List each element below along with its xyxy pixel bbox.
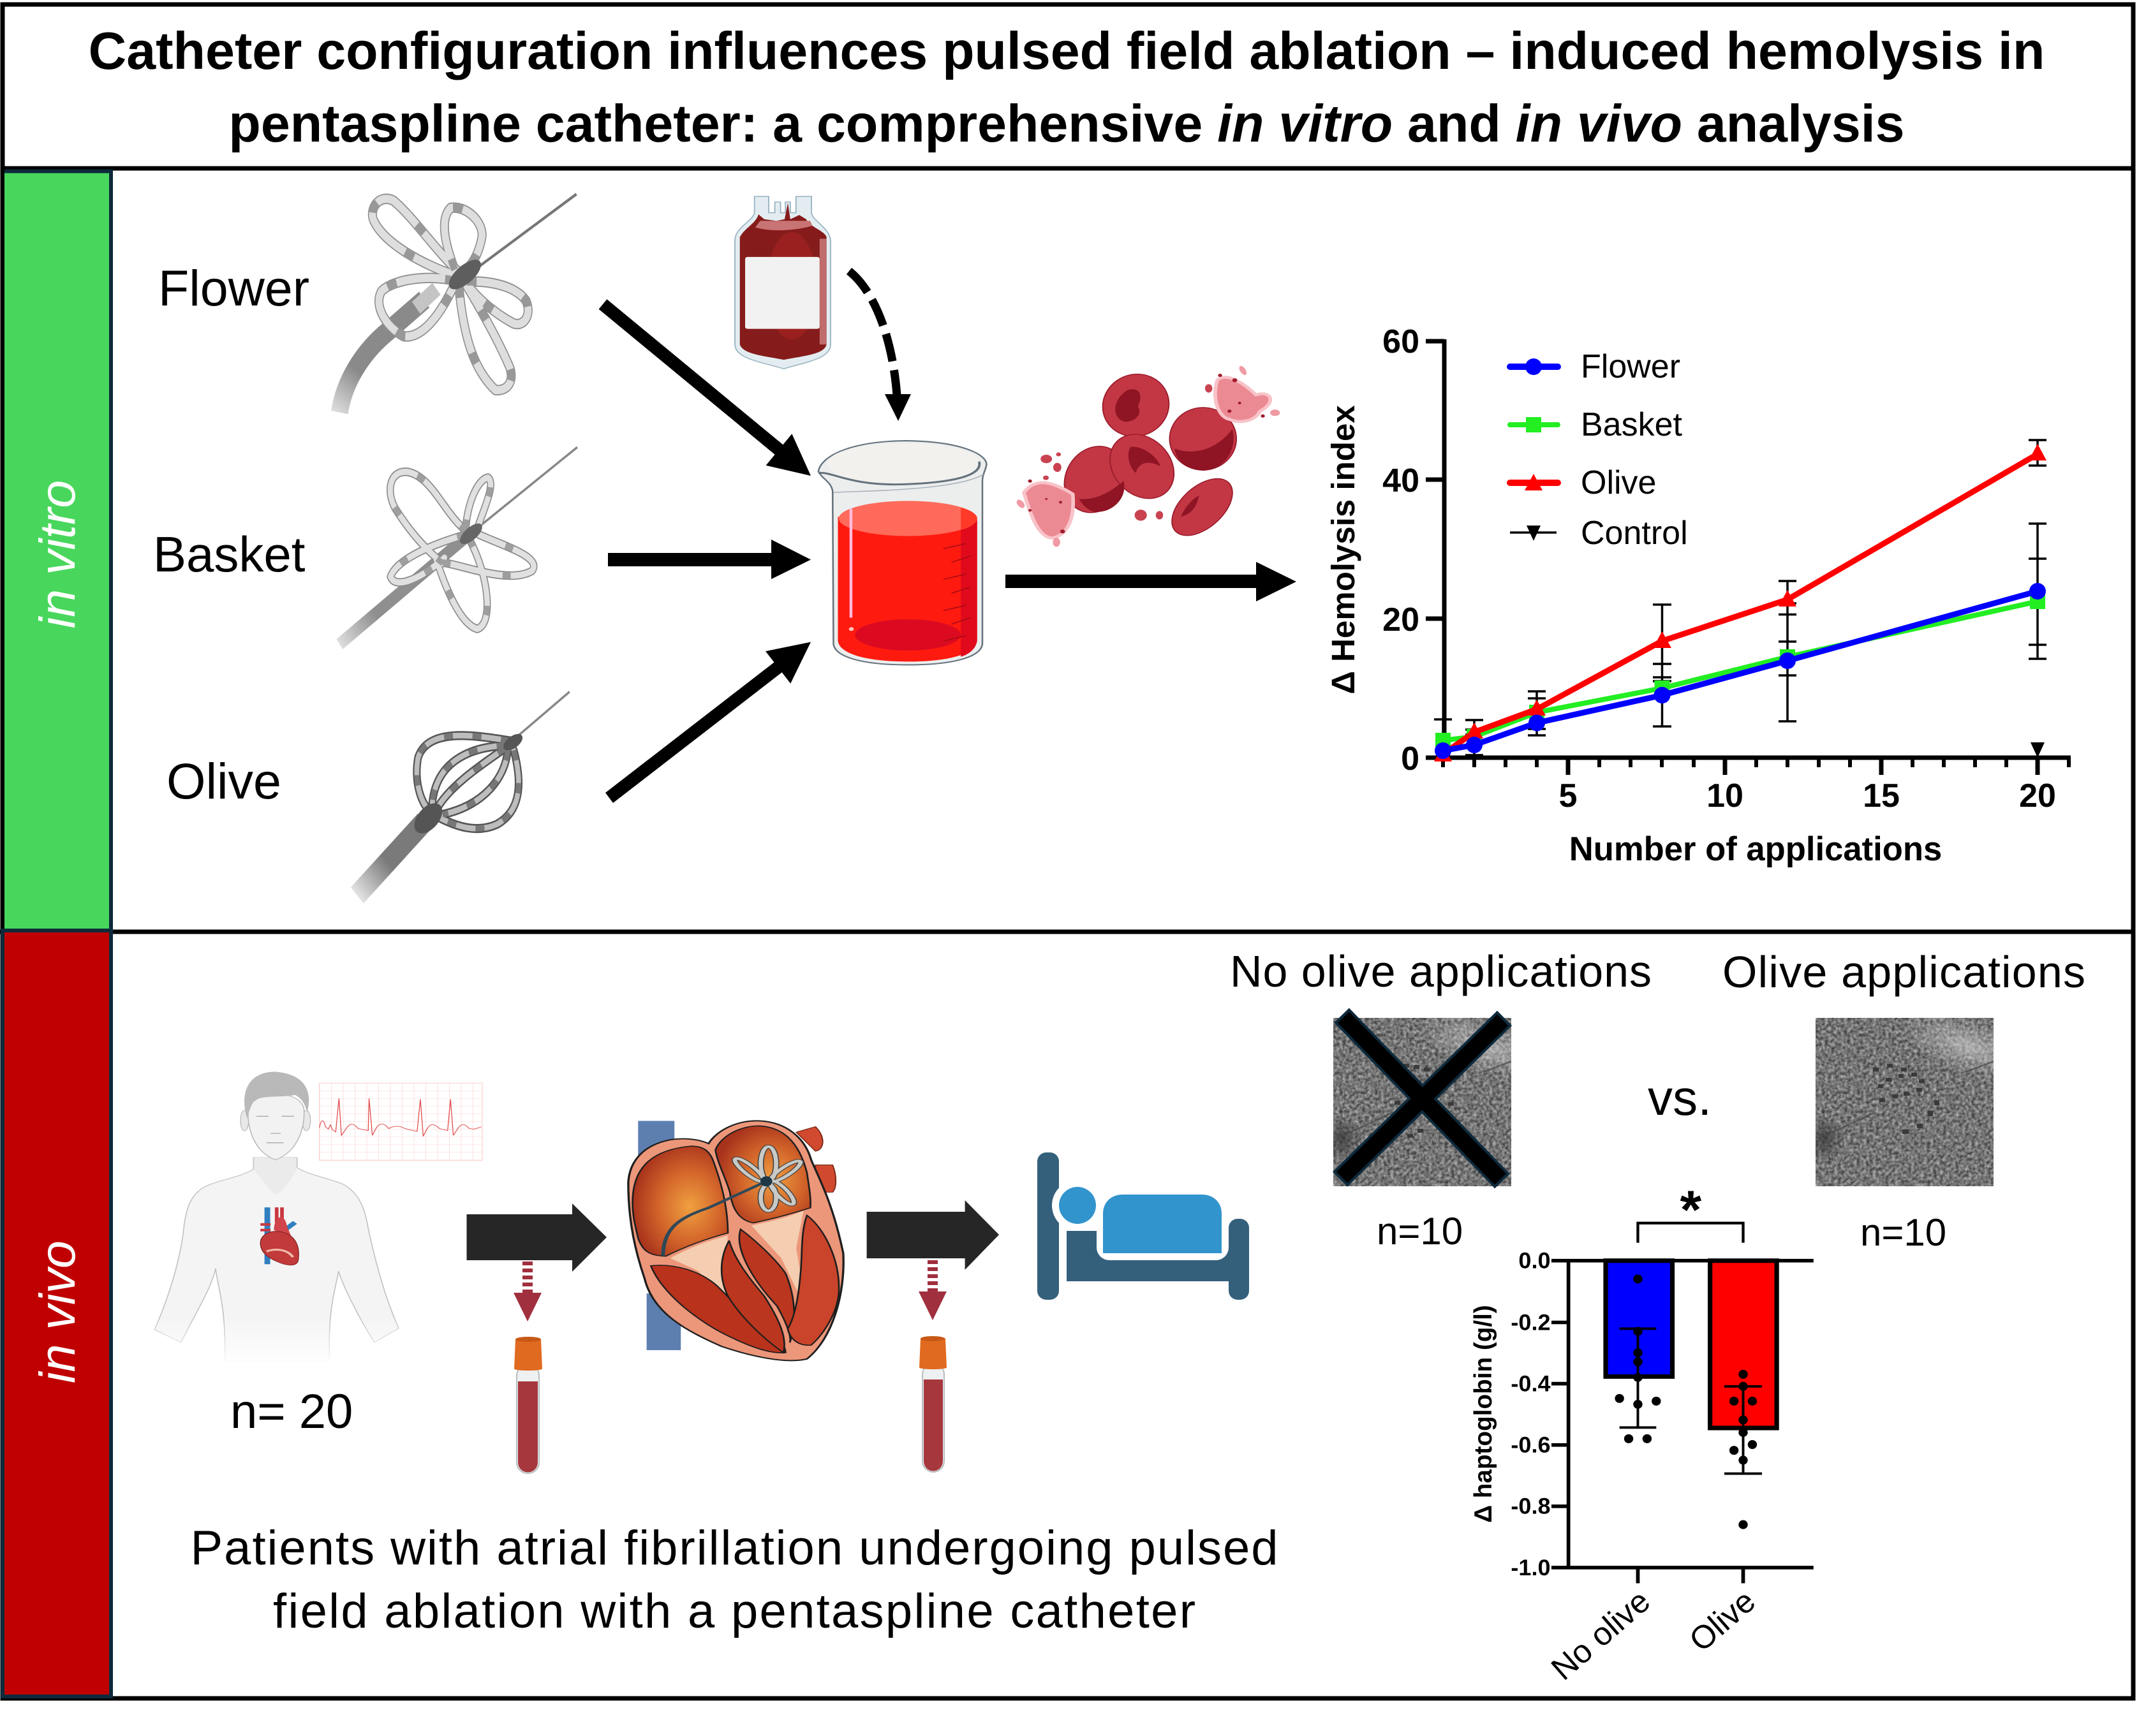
text: vs.: vs. [1648, 1070, 1712, 1126]
chart error bars [1434, 440, 2046, 758]
icon: heart with catheter [628, 1121, 843, 1360]
x tick labels: 10 [1706, 777, 1743, 814]
arrow: beaker to chart [1005, 562, 1296, 601]
text: patient description: Patients with atrial fibrillation undergoing pulsed [190, 1521, 1278, 1575]
arrow: first blood draw [514, 1262, 542, 1321]
title: pentaspline catheter: a comprehensive in vitro and in vivo analysis [228, 94, 1905, 153]
text: patient description: field ablation with a pentaspline catheter [273, 1584, 1195, 1638]
significance bracket [1638, 1223, 1743, 1243]
series: flower [1435, 583, 2046, 759]
title [3, 4, 2133, 168]
error bars [1620, 1328, 1762, 1474]
bar chart: haptoglobin [1470, 1181, 1814, 1687]
bar chart tick labels: -1.0 [1511, 1555, 1551, 1580]
in vitro side label: in vitro [29, 480, 85, 628]
x tick labels: 5 [1559, 777, 1577, 814]
label: Flower: Flower [158, 260, 309, 316]
y tick labels: 40 [1382, 462, 1419, 499]
bar chart tick labels [1511, 1248, 1551, 1580]
chart axes [1426, 339, 2071, 775]
y tick labels [1382, 323, 1419, 777]
series: olive [1434, 444, 2046, 761]
chart legend: Olive [1581, 464, 1656, 501]
control marker [2031, 742, 2045, 758]
chart legend [1510, 348, 1688, 552]
icon: red blood cells [1015, 365, 1280, 547]
x tick labels: 15 [1863, 777, 1900, 814]
icon: olive catheter [357, 692, 570, 895]
text: n=10 right: n=10 [1860, 1211, 1946, 1254]
bar chart axes [1551, 1259, 1814, 1583]
fluoroscopy image: no olive (crossed out) [1323, 999, 1562, 1186]
y tick labels: 20 [1382, 601, 1419, 638]
icon: blood bag [735, 196, 831, 369]
y axis title: Δ Hemolysis index [1325, 405, 1361, 695]
line chart: hemolysis index [1325, 323, 2071, 868]
title: Catheter configuration influences pulsed field ablation – induced hemolysis in [89, 22, 2045, 80]
heading: no olive applications: No olive applications [1230, 946, 1652, 996]
arrow: flower to beaker [599, 299, 811, 476]
series: basket [1435, 594, 2045, 748]
label: Olive: Olive [166, 753, 281, 809]
in vitro side label [4, 170, 113, 931]
in vivo side label [3, 931, 111, 1696]
bar chart tick labels: -0.4 [1511, 1371, 1551, 1396]
bar: olive [1710, 1261, 1777, 1428]
heading: olive applications: Olive applications [1722, 947, 2085, 997]
icon: basket catheter [339, 447, 577, 644]
arrow: procedure to recovery [867, 1200, 999, 1270]
arrow: dashed blood to beaker [849, 271, 911, 421]
bar chart tick labels: -0.8 [1511, 1494, 1551, 1519]
in vivo side label: in vivo [29, 1240, 85, 1383]
significance star: * [1680, 1181, 1702, 1240]
arrow: basket to beaker [608, 540, 811, 579]
chart legend: Control [1581, 515, 1688, 552]
panel: in vivo [0, 931, 2135, 1698]
arrow: patient to procedure [467, 1203, 607, 1272]
panel: in vitro [3, 168, 2133, 932]
icon: hospital bed [1037, 1152, 1249, 1300]
icon: second blood tube [919, 1336, 947, 1472]
arrow: olive to beaker [605, 642, 811, 803]
y tick labels: 0 [1401, 740, 1419, 777]
category label: No olive: No olive [1544, 1582, 1657, 1687]
icon: first blood tube [514, 1337, 542, 1473]
icon: patient with heart and ECG [149, 1071, 482, 1365]
y tick labels: 60 [1382, 323, 1419, 360]
text: n= 20: n= 20 [230, 1385, 353, 1439]
icon: beaker [818, 441, 986, 665]
bar chart tick labels: 0.0 [1518, 1248, 1551, 1274]
chart legend: Basket [1581, 406, 1683, 443]
small heart [260, 1207, 299, 1265]
x axis title: Number of applications [1569, 830, 1942, 868]
bar chart axis title: Δ haptoglobin (g/l) [1470, 1305, 1497, 1523]
chart minor ticks [1443, 758, 2069, 767]
x tick labels: 20 [2019, 777, 2056, 814]
fluoroscopy image: olive [1805, 999, 2044, 1186]
text: n=10 left: n=10 [1377, 1210, 1463, 1253]
bar chart tick labels: -0.6 [1511, 1432, 1551, 1458]
ECG trace [320, 1083, 482, 1160]
arrow: second blood draw [919, 1260, 947, 1320]
category label: Olive: Olive [1682, 1582, 1762, 1659]
label: Basket: Basket [153, 526, 306, 582]
chart legend: Flower [1581, 348, 1680, 385]
text: patient description [190, 1521, 1278, 1638]
x tick labels [1559, 777, 2056, 814]
data points [1615, 1274, 1757, 1529]
bar chart tick labels: -0.2 [1511, 1310, 1551, 1335]
icon: flower catheter [339, 194, 577, 413]
bar: no olive [1606, 1261, 1673, 1376]
